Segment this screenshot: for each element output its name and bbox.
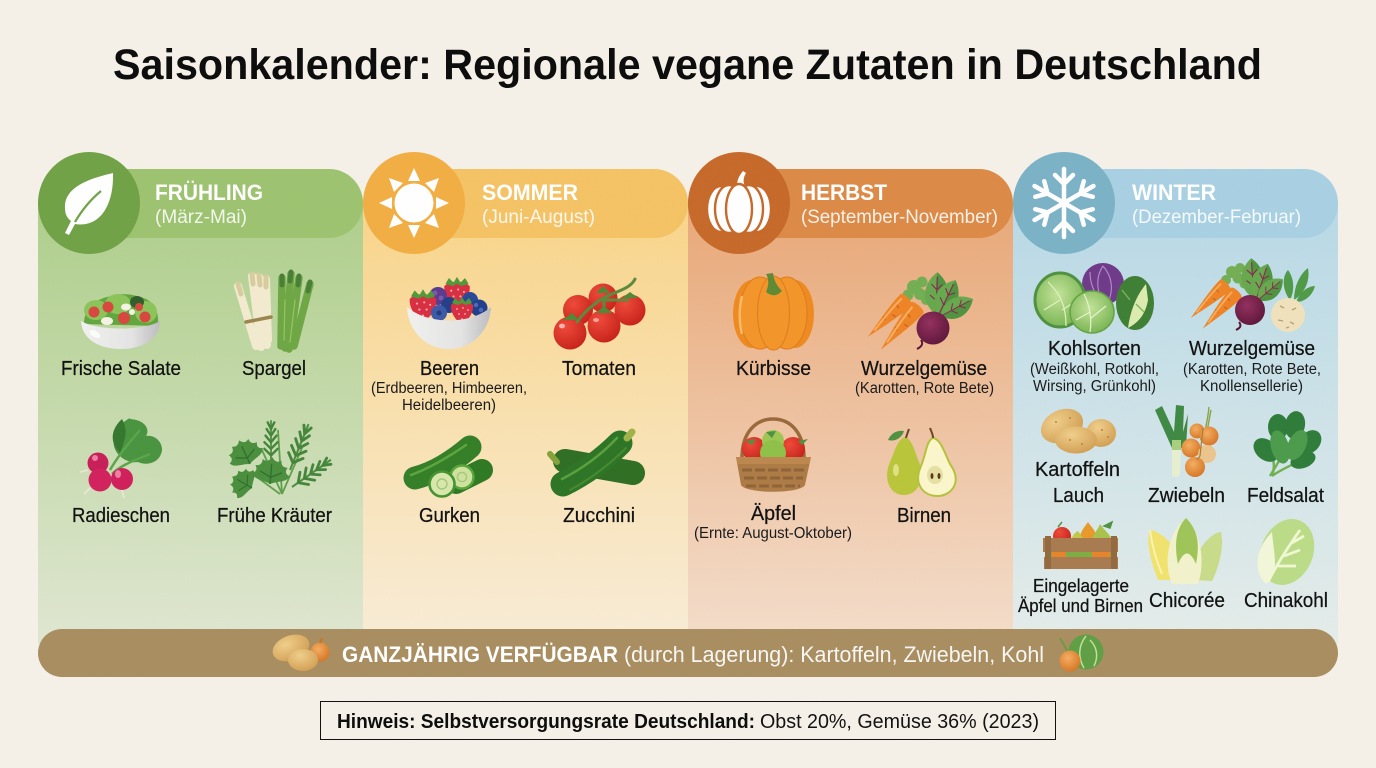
note box: Obst 20%, Gemüse 36% (2023) [760, 711, 1039, 733]
label [371, 358, 527, 414]
icon: chicory [1148, 518, 1222, 584]
label: (Karotten, Rote Bete) [855, 380, 994, 397]
icon: lamb's lettuce [1249, 409, 1326, 476]
label: Chinakohl [1244, 590, 1328, 612]
item: Chinakohl [1244, 511, 1328, 612]
label [694, 503, 852, 542]
panel: Herbst [688, 152, 1013, 644]
label: Beeren [420, 358, 479, 380]
item: Frühe Kräuter [217, 420, 335, 527]
icon: cabbages [1035, 263, 1154, 333]
item: Kartoffeln Lauch [1035, 402, 1120, 507]
item: Feldsalat [1247, 409, 1326, 507]
bar text: GANZJÄHRIG VERFÜGBAR [342, 642, 618, 667]
label: (Weißkohl, Rotkohl, [1030, 361, 1159, 378]
label: Eingelagerte [1033, 576, 1129, 596]
icon: pears [887, 428, 956, 496]
title: Saisonkalender: Regionale vegane Zutaten in Deutschland [113, 41, 1262, 89]
label: Zwiebeln [1148, 485, 1225, 507]
item: Radieschen [72, 418, 170, 527]
item: Birnen [887, 428, 956, 527]
icon: sun [363, 152, 465, 254]
label [855, 358, 994, 397]
header pill: Sommer [363, 169, 688, 238]
item: Beeren [371, 277, 527, 414]
icon: potatoes [1035, 402, 1116, 454]
item: Spargel [238, 272, 310, 380]
item: Tomaten [554, 279, 646, 380]
item: Chicorée [1148, 518, 1225, 612]
icon: pumpkin [733, 273, 814, 350]
icon: zucchini [550, 432, 633, 490]
season heading: Winter: (Dezember-Februar) [1132, 207, 1301, 228]
icon: napa cabbage [1250, 511, 1324, 593]
panel: Winter [1013, 152, 1338, 644]
label: Wirsing, Grünkohl) [1033, 378, 1156, 395]
item: Kohlsorten [1030, 263, 1159, 395]
item: Kürbisse [733, 273, 814, 380]
icon: salad bowl [81, 294, 160, 349]
note box [320, 702, 1056, 740]
season heading: Herbst: (September-November) [801, 207, 998, 228]
label [1030, 338, 1159, 395]
label: Kürbisse [736, 358, 811, 380]
icon: herbs [223, 420, 335, 502]
item: Zucchini [550, 432, 635, 527]
icon: asparagus [238, 272, 310, 349]
season heading: Herbst [801, 180, 998, 228]
label: Wurzelgemüse [1189, 338, 1315, 360]
label: (Karotten, Rote Bete, [1183, 361, 1321, 378]
season heading: Frühling: FRÜHLING [155, 180, 263, 205]
label: Birnen [897, 505, 951, 527]
label: Äpfel [751, 503, 796, 525]
bar text: (durch Lagerung): Kartoffeln, Zwiebeln, Kohl [624, 642, 1044, 667]
season heading: Herbst: HERBST [801, 180, 888, 205]
season heading: Sommer: SOMMER [482, 180, 578, 205]
label: Tomaten [562, 358, 636, 380]
season heading: Frühling [155, 180, 263, 228]
label: Heidelbeeren) [402, 397, 496, 414]
label: Feldsalat [1247, 485, 1324, 507]
icon: pumpkin white [688, 152, 790, 254]
label: Kartoffeln [1035, 459, 1120, 481]
header pill: Frühling [38, 169, 363, 238]
year-round bar [38, 629, 1338, 677]
icon: onion and cabbage [1060, 634, 1104, 672]
label: Kohlsorten [1048, 338, 1141, 360]
label [1018, 576, 1143, 616]
season heading: Frühling: (März-Mai) [155, 207, 247, 228]
season heading: Sommer [482, 180, 595, 228]
label: Knollensellerie) [1200, 378, 1303, 395]
season heading: Winter: WINTER [1132, 180, 1216, 205]
header pill: Herbst [688, 169, 1013, 238]
icon: berry bowl [407, 277, 491, 349]
icon: leaf [38, 152, 140, 254]
icon: tomatoes [554, 279, 646, 350]
icon: snowflake [1013, 152, 1115, 254]
season heading: Sommer: (Juni-August) [482, 207, 595, 228]
icon: fruit crate [1043, 522, 1118, 569]
label: Frische Salate [61, 358, 181, 380]
label: Frühe Kräuter [217, 505, 332, 527]
icon: carrots and beet [862, 272, 978, 355]
item: Eingelagerte Äpfel und Birnen [1018, 522, 1143, 616]
label: Radieschen [72, 505, 170, 527]
item: Äpfel [694, 419, 852, 542]
icon: potatoes and onion [269, 630, 330, 671]
label [1035, 459, 1120, 507]
label: Zucchini [563, 505, 635, 527]
item: Zwiebeln [1148, 405, 1225, 507]
item: Frische Salate [61, 294, 181, 380]
label: Spargel [242, 358, 306, 380]
label [1183, 338, 1321, 395]
note box: Hinweis: Selbstversorgungsrate Deutschland: [337, 711, 755, 733]
item: Wurzelgemüse Herbst [855, 272, 994, 397]
label: Lauch [1053, 485, 1104, 507]
panel: Frühling [38, 152, 363, 644]
item: Wurzelgemüse Winter [1183, 257, 1321, 395]
icon: apple basket [736, 419, 811, 492]
header pill: Winter [1013, 169, 1338, 238]
label: (Ernte: August-Oktober) [694, 525, 852, 542]
panel: Sommer [363, 152, 688, 644]
label: Chicorée [1149, 590, 1225, 612]
bar text [342, 642, 1044, 667]
label: (Erdbeeren, Himbeeren, [371, 380, 527, 397]
icon: carrots, beet and celeriac [1186, 257, 1315, 334]
label: Äpfel und Birnen [1018, 596, 1143, 616]
icon: leek and onions [1155, 405, 1218, 477]
icon: cucumbers [411, 445, 482, 496]
icon: radishes [80, 418, 162, 498]
label: Wurzelgemüse [861, 358, 987, 380]
season heading: Winter [1132, 180, 1301, 228]
item: Gurken [411, 445, 482, 527]
label: Gurken [419, 505, 480, 527]
